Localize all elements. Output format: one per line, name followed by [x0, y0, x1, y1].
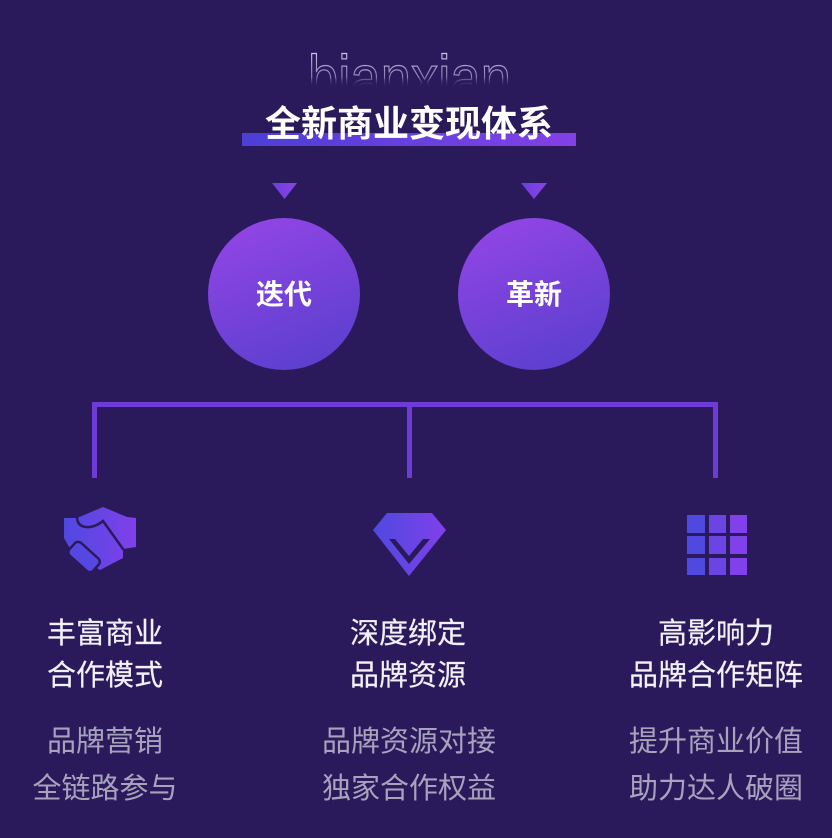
- text column 3: 助力达人破圈: [629, 773, 803, 805]
- text column 1: [32, 726, 178, 805]
- heading column 3: [629, 618, 803, 692]
- main diagram graphics: [64, 52, 747, 576]
- watermark: bianxian: bianxian: [308, 42, 511, 114]
- left circle: [208, 218, 360, 370]
- heading column 3: 高影响力: [658, 618, 774, 650]
- text column 3: [629, 726, 803, 805]
- text column 2: [322, 726, 496, 805]
- title underline bar: [242, 133, 576, 146]
- left triangle: [272, 183, 297, 199]
- heading column 2: 品牌资源: [350, 660, 466, 692]
- icon: handshake: [64, 507, 136, 574]
- title: 全新商业变现体系: [265, 103, 553, 144]
- heading column 2: 深度绑定: [350, 618, 466, 650]
- heading column 2: [350, 618, 466, 692]
- text column 1: 全链路参与: [32, 773, 178, 805]
- text column 2: 品牌资源对接: [322, 726, 496, 758]
- text column 2: 独家合作权益: [322, 773, 496, 805]
- heading column 1: [47, 618, 163, 692]
- text column 3: 提升商业价值: [629, 726, 803, 758]
- heading column 3: 品牌合作矩阵: [629, 660, 803, 692]
- circle label: 革新: 革新: [506, 279, 562, 310]
- icon: grid: [687, 515, 747, 575]
- right triangle: [521, 183, 547, 199]
- icon: diamond: [373, 513, 446, 576]
- connector tree: [94, 404, 716, 478]
- heading column 1: 丰富商业: [47, 618, 163, 650]
- circle label: 迭代: 迭代: [256, 279, 312, 310]
- heading column 1: 合作模式: [47, 660, 163, 692]
- text column 1: 品牌营销: [47, 726, 163, 758]
- right circle: [458, 218, 610, 370]
